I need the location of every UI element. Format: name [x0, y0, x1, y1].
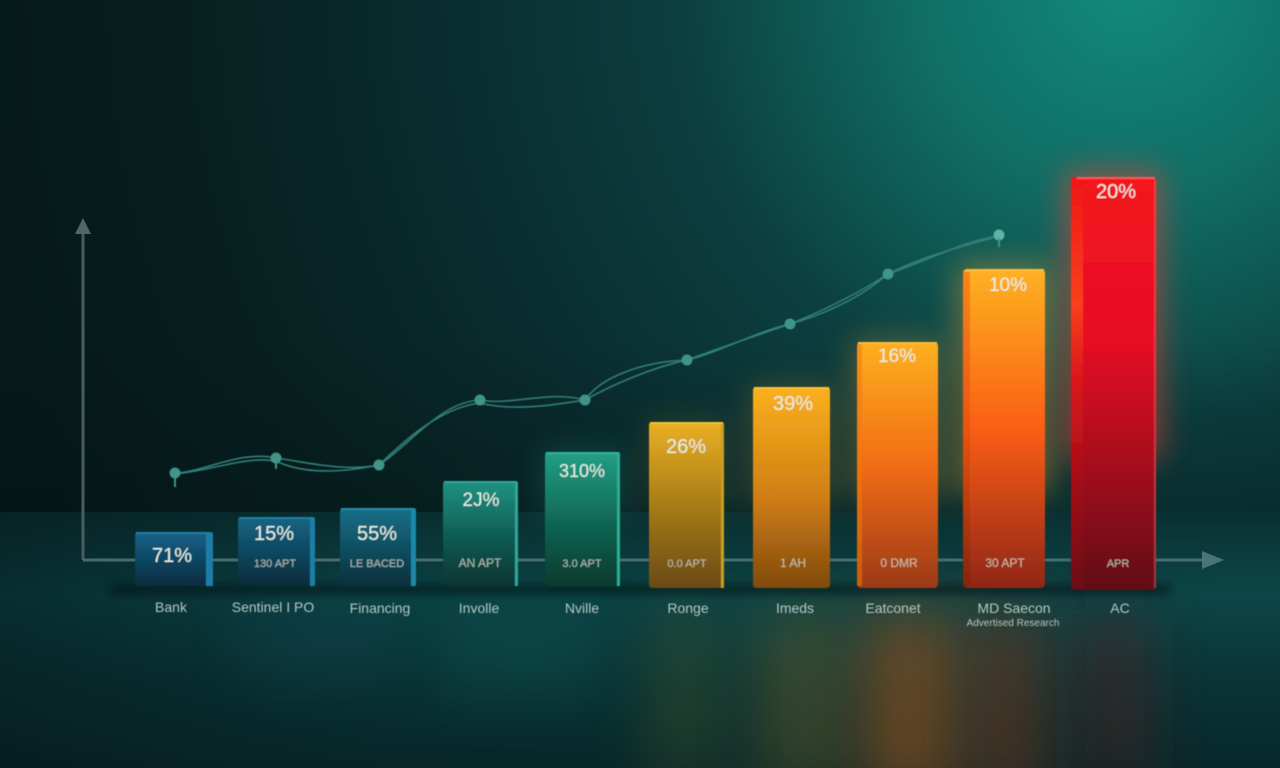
bar 2: 15% — [254, 523, 294, 545]
bar 3: LE BACED — [350, 558, 404, 570]
category labels: Sentinel I PO — [232, 599, 314, 615]
bar 3: 55% — [357, 523, 397, 545]
bar 1: 71% — [152, 545, 192, 567]
bar 4: AN APT — [459, 556, 502, 570]
bar 8: 0 DMR — [880, 556, 918, 570]
bar 5: 3.0 APT — [562, 558, 602, 570]
bar shadow on floor — [110, 585, 1170, 594]
bar 10 — [1071, 177, 1156, 590]
bar 3 — [340, 508, 416, 586]
category labels: Nville — [565, 600, 599, 616]
category labels: Involle — [459, 600, 499, 616]
bar 9: 10% — [989, 275, 1027, 296]
bar 2 — [238, 517, 315, 586]
category labels: AC — [1110, 600, 1130, 616]
category labels — [155, 599, 1130, 629]
bar 6: 0.0 APT — [667, 558, 707, 570]
bars — [135, 177, 1156, 590]
category labels: Advertised Research — [967, 618, 1059, 629]
bar 7: 1 AH — [780, 556, 806, 570]
x axis arrow — [83, 551, 1224, 569]
bar 10: APR — [1107, 558, 1129, 570]
bar 7 — [753, 387, 830, 588]
bar 4: 2J% — [463, 490, 500, 511]
background wall — [0, 0, 1280, 520]
bar glows — [541, 170, 1162, 518]
background floor — [0, 512, 1280, 768]
category labels: Eatconet — [865, 600, 921, 616]
bar 6: 26% — [666, 436, 706, 458]
bar 8 — [857, 342, 938, 588]
category labels: Imeds — [776, 600, 814, 616]
bar 9 — [963, 269, 1045, 588]
bar 1 — [135, 532, 213, 586]
bar 2: 130 APT — [254, 558, 296, 570]
bar 7: 39% — [773, 393, 813, 415]
trend points — [170, 230, 1004, 487]
category labels: Ronge — [667, 600, 709, 616]
bar 5 — [545, 452, 620, 586]
category labels: MD Saecon — [977, 600, 1051, 616]
bar 6 — [649, 422, 724, 588]
bar 8: 16% — [878, 346, 916, 367]
bar 5: 310% — [559, 461, 605, 481]
y axis arrow — [75, 218, 91, 560]
bar 9: 30 APT — [985, 556, 1025, 570]
bar 10: 20% — [1096, 181, 1136, 203]
bar 4 — [443, 481, 518, 586]
category labels: Bank — [155, 599, 188, 615]
category labels: Financing — [350, 600, 410, 616]
trend line — [175, 236, 999, 474]
